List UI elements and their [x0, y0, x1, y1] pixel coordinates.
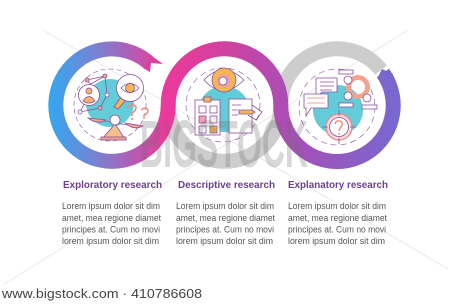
text block: column 2: Lorem ipsum dolor sit dim: [176, 201, 274, 212]
text block: column 2: amet, mea regione diamet: [176, 213, 275, 224]
text block: column 1: principes at. Cum no movi: [62, 224, 160, 236]
text block: column 1: [62, 201, 161, 247]
text block: column 3: lorem ipsum dolor sit dim: [288, 236, 385, 247]
icon: exploratory research: [74, 69, 148, 141]
text block: column 1: amet, mea regione diamet: [62, 213, 161, 224]
text block: column 2: lorem ipsum dolor sit dim: [176, 236, 273, 247]
icon: explanatory research: [299, 69, 377, 145]
text block: column 1: Lorem ipsum dolor sit dim: [62, 201, 160, 212]
text block: column 3: [288, 201, 387, 247]
text block: column 1: lorem ipsum dolor sit dim: [62, 236, 159, 247]
text block: column 3: amet, mea regione diamet: [288, 213, 387, 224]
footer caption: www.bigstock.com · 410786608: [1, 287, 202, 301]
text block: column 2: [176, 201, 275, 247]
ribbon: gray back arcs: [168, 49, 381, 161]
ribbon: gradient loop with arrow ends: [56, 49, 393, 161]
text block: column 3: principes at. Cum no movi: [288, 224, 386, 236]
icon: descriptive research: [186, 68, 262, 142]
heading: exploratory research: Exploratory research: [63, 179, 162, 191]
heading: explanatory research: Explanatory research: [288, 179, 388, 191]
text block: column 2: principes at. Cum no movi: [176, 224, 274, 236]
text block: column 3: Lorem ipsum dolor sit dim: [288, 201, 386, 212]
heading: descriptive research: Descriptive research: [178, 179, 275, 191]
